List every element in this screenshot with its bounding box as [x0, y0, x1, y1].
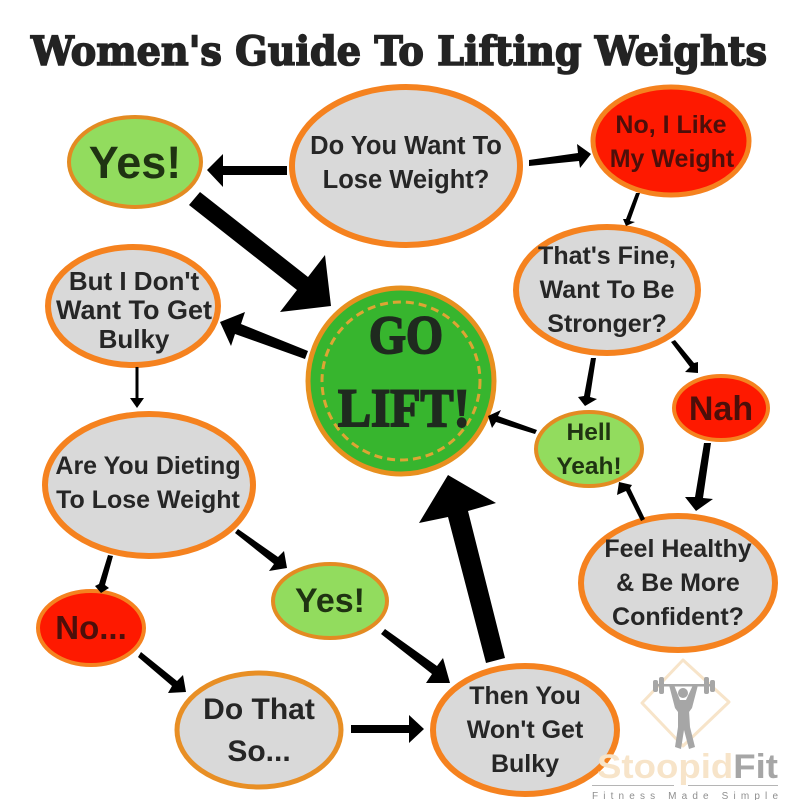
logo: StoopidFit: [592, 660, 778, 800]
arrow: Yes to Then You: [381, 629, 450, 683]
node: But I Don't Want To Get Bulky: Want To Get: [56, 295, 212, 325]
node: Feel Healthy & Be More Confident?: Feel Healthy: [604, 535, 752, 563]
node: Feel Healthy & Be More Confident?: & Be More: [616, 569, 740, 597]
node: Then You Won't Get Bulky: Bulky: [491, 750, 559, 778]
node: But I Don't Want To Get Bulky: Bulky: [99, 324, 170, 354]
node: Feel Healthy & Be More Confident?: Confident?: [612, 603, 744, 631]
node: Do You Want To Lose Weight?: [292, 87, 520, 245]
node: Are You Dieting To Lose Weight: [45, 414, 253, 556]
node: No...: No...: [55, 609, 127, 646]
arrow: Nah to Feel Healthy: [685, 443, 713, 511]
arrow: That's Fine to Hell Yeah: [578, 358, 597, 406]
node: But I Don't Want To Get Bulky: [48, 247, 218, 365]
title: Women's Guide To Lifting Weights: [30, 28, 767, 75]
node: Do That So...: So...: [227, 735, 291, 768]
node: Do That So...: [177, 673, 341, 787]
node: Yes! top left: [69, 117, 201, 207]
node: Do That So...: Do That: [203, 693, 315, 726]
node: Do You Want To Lose Weight?: Lose Weight?: [323, 166, 489, 194]
logo wordmark: Stoopid Fit: [597, 748, 778, 786]
node: That's Fine, Want To Be Stronger?: [516, 227, 698, 353]
arrow: big Then You to Go Lift: [419, 475, 505, 663]
node: No, I Like My Weight: My Weight: [610, 145, 735, 173]
node: GO LIFT!: LIFT!: [338, 378, 470, 438]
arrow: Do You Want to No: [529, 144, 591, 168]
arrow: No to That's Fine: [623, 193, 640, 226]
node: No...: [38, 591, 144, 665]
node: That's Fine, Want To Be Stronger?: That's Fine,: [538, 242, 676, 270]
node: Yes! lower: Yes!: [295, 582, 365, 620]
node: Nah: Nah: [689, 390, 753, 428]
node: Are You Dieting To Lose Weight: To Lose Weight: [56, 486, 241, 514]
node: GO LIFT!: [308, 288, 494, 474]
node: Do You Want To Lose Weight?: Do You Want To: [310, 132, 502, 160]
arrow: That's Fine to Nah: [671, 340, 698, 373]
node: Then You Won't Get Bulky: [433, 666, 617, 794]
arrow: big Yes to Go Lift: [189, 192, 331, 312]
icon: diamond outline: [642, 660, 729, 746]
arrow: Are You Dieting to No: [95, 555, 113, 593]
node: No, I Like My Weight: [593, 87, 749, 195]
icon: weightlifter figure: [653, 677, 715, 749]
node: No, I Like My Weight: No, I Like: [615, 111, 727, 139]
node: That's Fine, Want To Be Stronger?: Stronger?: [547, 310, 667, 338]
arrow: But I Don't to Are You Dieting: [130, 367, 144, 408]
node: GO LIFT!: GO: [369, 305, 443, 365]
node: Hell Yeah!: Yeah!: [556, 453, 622, 480]
node: Yes! lower: [273, 564, 387, 638]
node: Are You Dieting To Lose Weight: Are You Dieting: [55, 452, 241, 480]
node: Feel Healthy & Be More Confident?: [581, 516, 775, 650]
arrow: Are You Dieting to Yes: [235, 529, 287, 571]
node: Hell Yeah!: Hell: [567, 419, 611, 446]
node: Nah: [674, 376, 768, 440]
node: Yes! top left: Yes!: [89, 137, 181, 188]
arrow: No to Do That: [138, 652, 186, 693]
arrow: Go Lift to But I Don't: [220, 312, 308, 359]
node: Then You Won't Get Bulky: Won't Get: [467, 716, 584, 744]
arrow: Do You Want to Yes: [207, 154, 287, 187]
arrow: Feel Healthy to Hell Yeah: [617, 482, 645, 521]
arrow: Hell Yeah to Go Lift: [488, 410, 537, 434]
node: That's Fine, Want To Be Stronger?: Want To Be: [540, 276, 674, 304]
node: Then You Won't Get Bulky: Then You: [469, 682, 581, 710]
node: But I Don't Want To Get Bulky: But I Don't: [69, 266, 200, 296]
node: Hell Yeah!: [536, 412, 642, 486]
arrow: Do That to Then You: [351, 715, 424, 743]
